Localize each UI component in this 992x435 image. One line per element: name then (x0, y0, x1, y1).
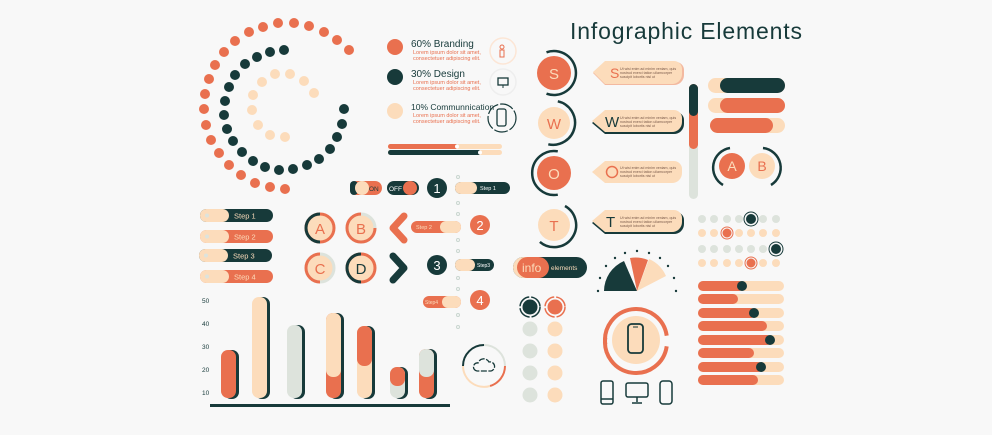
legend: Lorem ipsum dolor sit amet, (413, 50, 481, 56)
toggle: off: OFF (389, 186, 402, 193)
SWOT tags: nostrud exerci tation ullamcorper (620, 170, 673, 174)
step pills timeline: Step 1 (480, 186, 496, 192)
step pills timeline (411, 182, 510, 308)
SWOT tags: suscipit lobortis nisl ut (620, 75, 655, 79)
ABCD circles (306, 214, 375, 282)
ABCD circles: B (356, 221, 366, 238)
step pills timeline: Step4 (425, 300, 438, 306)
progress bars (388, 144, 502, 155)
vertical slider (689, 84, 698, 199)
SWOT tags: T (606, 214, 615, 231)
bar chart: 50 (202, 298, 210, 305)
legend: Lorem ipsum dolor sit amet, (413, 113, 481, 119)
legend: Lorem ipsum dolor sit amet, (413, 80, 481, 86)
step pills timeline: Step 2 (416, 225, 432, 231)
SWOT tags: Ut wisi enim ad minim veniam, quis (620, 116, 676, 120)
toggle: off (387, 181, 419, 195)
icon: phone (488, 104, 516, 132)
ABCD circles: C (315, 261, 326, 278)
AB circles: A (727, 158, 737, 174)
vertical dotted timeline (456, 176, 460, 328)
legend: 60% Branding (411, 39, 474, 50)
ABCD circles: A (315, 221, 325, 238)
phone circle (601, 305, 667, 377)
icon: cloud circle (463, 345, 505, 387)
left step pills: Step 1 (234, 212, 256, 220)
SWOT tags: Ut wisi enim ad minim veniam, quis (620, 216, 676, 220)
icon: person (490, 38, 516, 64)
SWOT circles: W (547, 116, 562, 133)
SWOT tags: suscipit lobortis nisl ut (620, 224, 655, 228)
icon: monitor (490, 69, 516, 95)
dot spiral (199, 18, 354, 194)
SWOT tags (592, 61, 684, 234)
circle column (520, 297, 565, 402)
SWOT circles: O (548, 166, 560, 183)
SWOT tags: Ut wisi enim ad minim veniam, quis (620, 166, 676, 170)
SWOT tags: nostrud exerci tation ullamcorper (620, 71, 673, 75)
info elements pill: elements (551, 265, 578, 272)
info elements pill (513, 257, 587, 278)
SWOT tags: W (605, 114, 620, 131)
toggle: on: ON (369, 186, 379, 193)
dot grid (698, 212, 783, 269)
bar chart: 10 (202, 390, 210, 397)
bar chart: 30 (202, 344, 210, 351)
legend (387, 39, 494, 125)
bar chart: 40 (202, 321, 210, 328)
AB circles: B (757, 158, 767, 174)
pie gauge (597, 250, 677, 292)
legend: 30% Design (411, 69, 465, 80)
toggle: on (350, 181, 382, 195)
step numbers (427, 178, 490, 310)
SWOT circles: T (549, 218, 559, 235)
left step pills: Step 2 (234, 232, 256, 242)
SWOT tags: suscipit lobortis nisl ut (620, 174, 655, 178)
SWOT tags: Ut wisi enim ad minim veniam, quis (620, 67, 676, 71)
left step pills (199, 209, 273, 283)
bar chart: 20 (202, 367, 210, 374)
step pills timeline: Step3 (477, 263, 490, 269)
slider bars (698, 281, 784, 385)
SWOT tags: suscipit lobortis nisl ut (620, 124, 655, 128)
AB circles (713, 148, 781, 185)
SWOT circles (532, 51, 576, 247)
step numbers: 3 (433, 258, 441, 273)
SWOT tags: S (610, 65, 619, 81)
device icons (601, 381, 672, 404)
bar chart (202, 297, 450, 407)
SWOT tags: nostrud exerci tation ullamcorper (620, 120, 673, 124)
info elements pill: info (522, 261, 542, 275)
left step pills: Step 4 (234, 272, 256, 282)
chevron left (393, 216, 404, 240)
step numbers: 2 (476, 218, 484, 233)
step numbers: 4 (476, 293, 484, 308)
legend: consectetuer adipiscing elit. (413, 86, 481, 92)
step numbers: 1 (433, 181, 441, 196)
SWOT tags: nostrud exerci tation ullamcorper (620, 220, 673, 224)
legend: 10% Communnication (411, 102, 494, 112)
legend: consectetuer adipiscing elit. (413, 119, 481, 125)
chevron right (393, 256, 404, 280)
title: Infographic Elements (570, 18, 802, 44)
SWOT circles: S (549, 66, 559, 83)
ABCD circles: D (356, 261, 367, 278)
horizontal pills (708, 78, 785, 133)
left step pills: Step 3 (233, 252, 255, 260)
legend: consectetuer adipiscing elit. (413, 56, 481, 62)
